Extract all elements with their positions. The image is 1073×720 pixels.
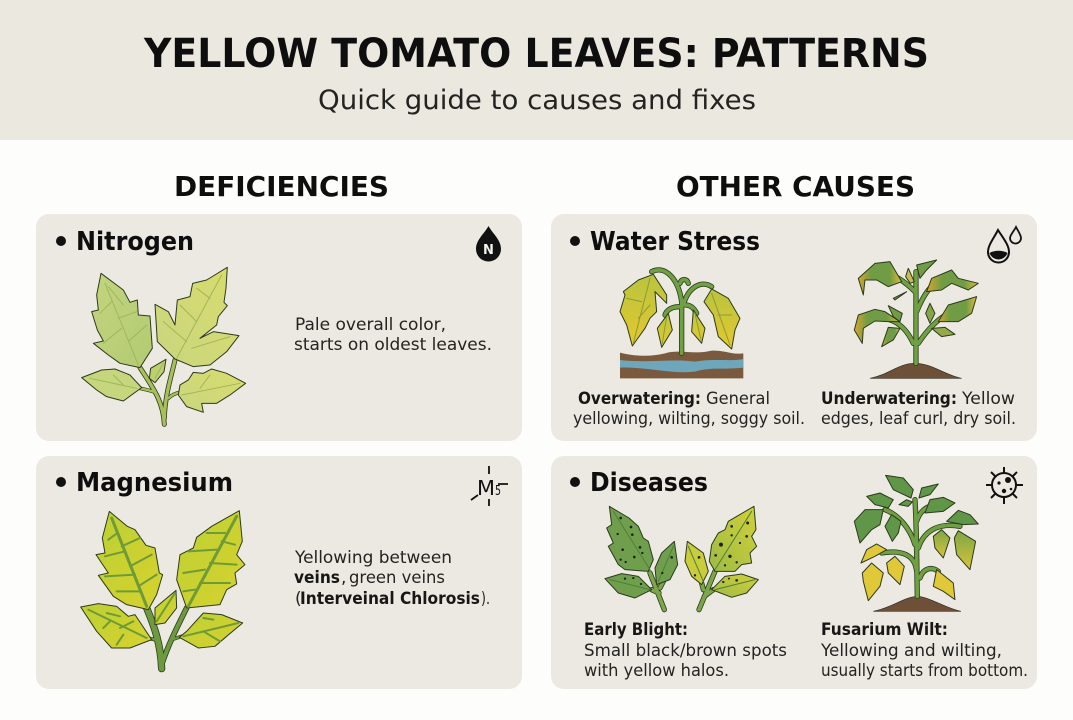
- overwatering caption: [573, 389, 805, 429]
- magnesium description: ).: [481, 589, 490, 609]
- underwatering caption: edges, leaf curl, dry soil.: [821, 409, 1016, 429]
- illustration: pale nitrogen leaves: [82, 267, 246, 424]
- icon: pathogen: [986, 467, 1023, 504]
- magnesium description: [294, 548, 490, 609]
- icon: water drops: [988, 227, 1021, 262]
- panel: diseases: [551, 456, 1037, 689]
- early blight caption: Small black/brown spots: [584, 641, 787, 661]
- magnesium description: Yellowing between: [294, 548, 452, 568]
- nitrogen description: [294, 315, 492, 355]
- fusarium wilt caption: usually starts from bottom.: [821, 661, 1028, 681]
- water stress heading: Water Stress: [590, 227, 760, 257]
- early blight caption: [584, 620, 787, 681]
- heading: deficiencies: DEFICIENCIES: [174, 170, 389, 203]
- underwatering caption: Yellow: [961, 389, 1015, 409]
- icon: nitrogen drop: N: [483, 243, 494, 258]
- illustration: fusarium wilt plant: [854, 475, 978, 611]
- early blight caption: Early Blight:: [584, 620, 688, 640]
- icon: nitrogen drop: [476, 226, 501, 262]
- illustration: underwatered plant: [854, 260, 978, 378]
- nitrogen description: starts on oldest leaves.: [294, 335, 492, 355]
- panel: water stress: [551, 214, 1037, 441]
- diseases heading: Diseases: [590, 468, 708, 498]
- magnesium description: (: [295, 589, 302, 609]
- nitrogen description: Pale overall color,: [295, 315, 446, 335]
- icon: magnesium symbol: M: [477, 476, 495, 500]
- underwatering caption: [821, 389, 1016, 429]
- overwatering caption: Overwatering:: [578, 389, 701, 409]
- magnesium description: Interveinal Chlorosis: [300, 589, 480, 609]
- underwatering caption: Underwatering:: [821, 389, 957, 409]
- icon: magnesium symbol: [471, 466, 508, 506]
- heading: other causes: OTHER CAUSES: [676, 170, 915, 203]
- illustration: overwatered plant: [620, 270, 743, 378]
- fusarium wilt caption: Fusarium Wilt:: [821, 620, 948, 640]
- title: YELLOW TOMATO LEAVES: PATTERNS: [143, 31, 929, 77]
- fusarium wilt caption: Yellowing and wilting,: [820, 641, 1002, 661]
- fusarium wilt caption: [820, 620, 1028, 681]
- magnesium description: ,: [341, 568, 346, 588]
- magnesium description: veins: [294, 568, 340, 588]
- magnesium description: green veins: [349, 568, 445, 588]
- magnesium heading: Magnesium: [76, 468, 233, 498]
- overwatering caption: General: [706, 389, 770, 409]
- panel: nitrogen: [36, 214, 522, 441]
- panel: magnesium: [36, 456, 522, 689]
- early blight caption: with yellow halos.: [584, 661, 729, 681]
- nitrogen heading: Nitrogen: [76, 227, 194, 257]
- header band: [0, 0, 1073, 140]
- illustration: interveinal chlorosis leaves: [81, 511, 245, 669]
- subtitle: Quick guide to causes and fixes: [318, 85, 756, 116]
- overwatering caption: yellowing, wilting, soggy soil.: [573, 409, 805, 429]
- icon: magnesium symbol: 5: [495, 484, 501, 499]
- illustration: early blight leaves: [605, 506, 758, 610]
